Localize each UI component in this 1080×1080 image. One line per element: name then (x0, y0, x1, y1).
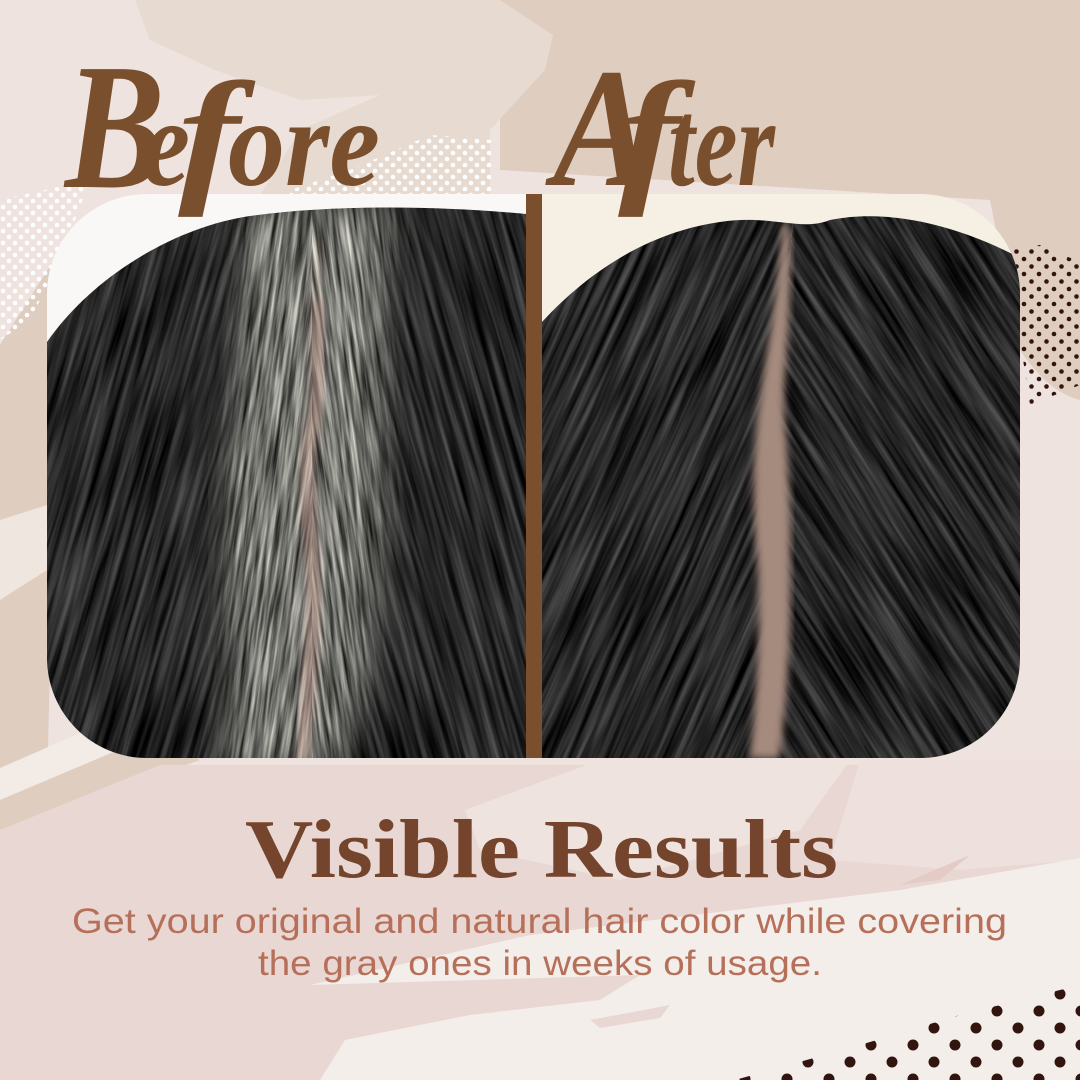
decorative dots: dark bottom right (735, 985, 1080, 1080)
divider bar (526, 194, 542, 758)
heading: After: f (618, 52, 696, 218)
decorative dots: white top (290, 135, 492, 195)
heading: Before: e (142, 75, 190, 213)
heading: Before: f (178, 52, 256, 218)
heading: After (545, 34, 776, 222)
description text: the gray ones in weeks of usage. (258, 944, 822, 983)
title: Visible Results: Visible Results (245, 803, 838, 896)
heading: Before: B (63, 27, 165, 226)
decorative dots: dark right (1000, 245, 1080, 405)
description text: Get your original and natural hair color while covering (72, 902, 1007, 941)
heading: After: ter (668, 75, 776, 213)
heading: Before: ore (228, 75, 380, 213)
photo: before (47, 194, 526, 758)
photo: after (542, 194, 1020, 758)
heading: After: A (545, 34, 653, 222)
description text (72, 902, 1007, 983)
decorative dots: white left (0, 180, 90, 340)
panel: before and after photo (47, 194, 1020, 758)
heading: Before (63, 27, 380, 226)
